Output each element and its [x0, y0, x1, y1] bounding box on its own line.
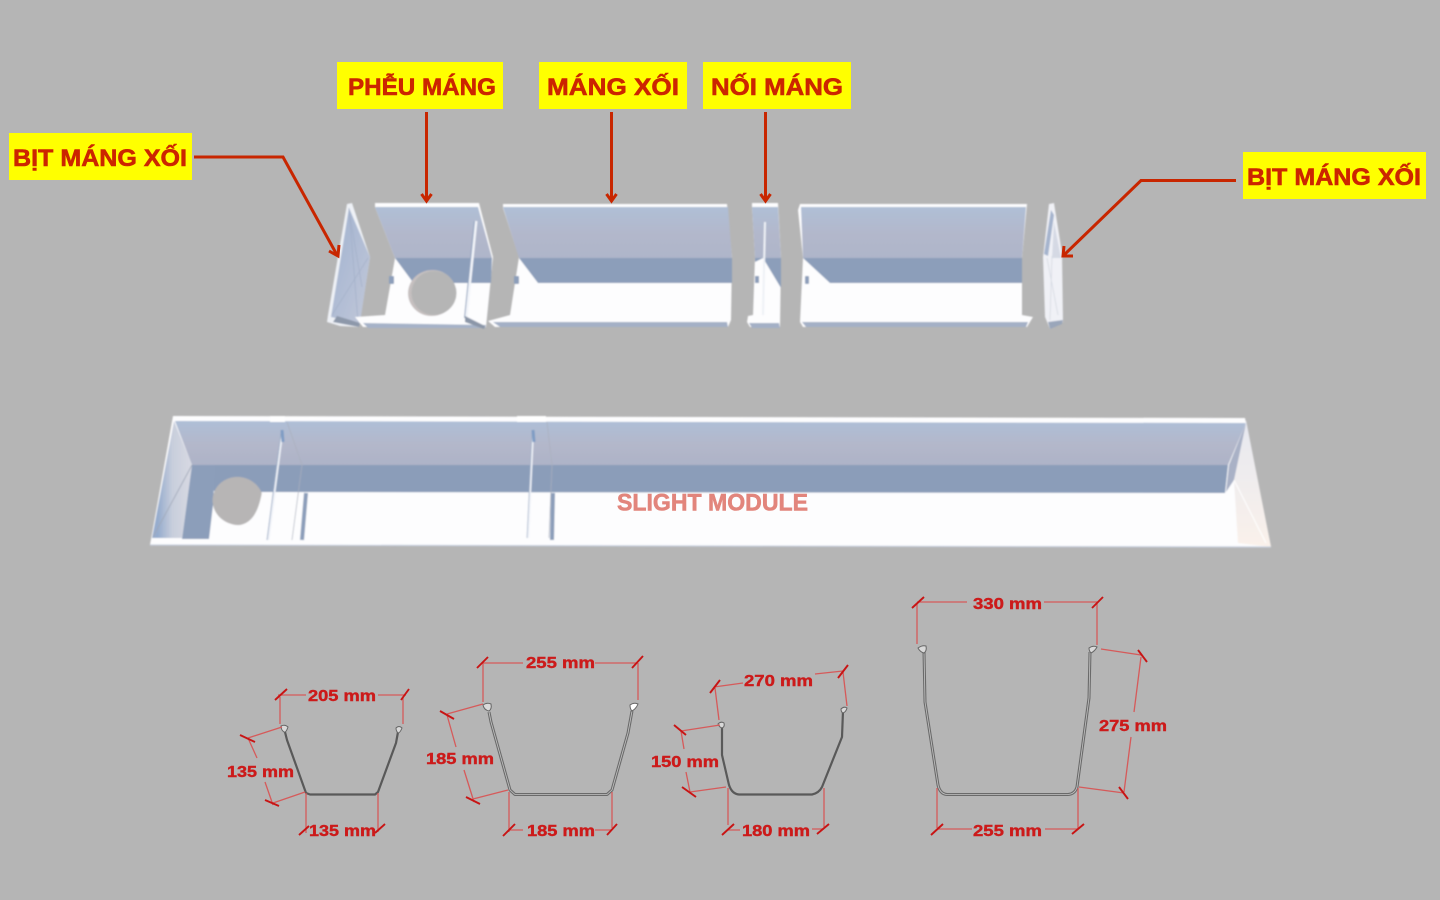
left end wall: [152, 421, 192, 538]
label: funnel: PHỄU MÁNG: [348, 72, 496, 101]
back wall: [175, 421, 1246, 465]
dimension ticks: [440, 656, 643, 836]
funnel hole: [405, 267, 459, 319]
arrow: right end cap: [1063, 180, 1236, 256]
profile: 205 mm gutter: [227, 688, 409, 840]
label: gutter: MÁNG XỐI: [547, 73, 679, 101]
dimension lines: [447, 663, 638, 832]
left floor shadow: [182, 465, 215, 539]
dimension ticks: [674, 665, 848, 835]
profile: 330 mm gutter: [912, 596, 1167, 840]
end cap right: [1043, 203, 1063, 329]
label: left end cap: BỊT MÁNG XỐI: [13, 144, 187, 172]
label: funnel: [337, 62, 503, 109]
product name: SLIGHT MODULE: [617, 490, 808, 516]
dimension lines: [248, 695, 406, 833]
side value: 150 mm: [651, 754, 719, 771]
arrow: left end cap: [194, 157, 339, 256]
connector tabs: [270, 416, 285, 422]
arrow: funnel: [422, 112, 432, 201]
funnel seam: [466, 221, 476, 318]
main gutter section: [488, 204, 732, 327]
label: connector: NỐI MÁNG: [711, 73, 843, 101]
profile: 255 mm gutter: [426, 655, 643, 840]
label: left end cap: [9, 133, 192, 180]
cross-section curve: [483, 703, 638, 794]
assembled long gutter: [150, 416, 1271, 547]
base value: 255 mm: [973, 823, 1042, 840]
profile: 270 mm gutter: [651, 665, 848, 840]
end cap left: [327, 203, 370, 327]
side value: 185 mm: [426, 751, 494, 768]
cross-section curve: [281, 725, 402, 794]
back wall shadow band: [192, 465, 1228, 493]
base value: 185 mm: [527, 823, 595, 840]
label: gutter: [539, 62, 687, 109]
connector piece: [747, 203, 781, 328]
width value: 270 mm: [744, 673, 813, 690]
side value: 275 mm: [1099, 718, 1167, 735]
dimension ticks: [912, 597, 1147, 835]
dimension lines: [681, 671, 847, 830]
label: connector: [703, 62, 851, 109]
arrow: gutter: [606, 112, 616, 201]
floor patch under hole: [209, 492, 266, 540]
cross-section curve: [918, 646, 1097, 794]
label: right end cap: BỊT MÁNG XỐI: [1247, 163, 1421, 191]
width value: 330 mm: [973, 596, 1042, 613]
base value: 135 mm: [309, 823, 376, 840]
arrow: connector: [760, 112, 770, 201]
width value: 205 mm: [308, 688, 376, 705]
drain hole: [208, 472, 268, 530]
label: right end cap: [1243, 152, 1426, 199]
base value: 180 mm: [742, 823, 810, 840]
right end wall: [1234, 420, 1271, 547]
dimension lines: [917, 602, 1141, 829]
cross-section curve: [718, 707, 847, 794]
side value: 135 mm: [227, 764, 294, 781]
width value: 255 mm: [526, 655, 595, 672]
seam strips: [268, 433, 282, 540]
second gutter section: [798, 204, 1033, 327]
funnel piece: [355, 203, 493, 329]
dimension ticks: [240, 689, 409, 835]
exploded gutter parts: [150, 203, 1271, 547]
